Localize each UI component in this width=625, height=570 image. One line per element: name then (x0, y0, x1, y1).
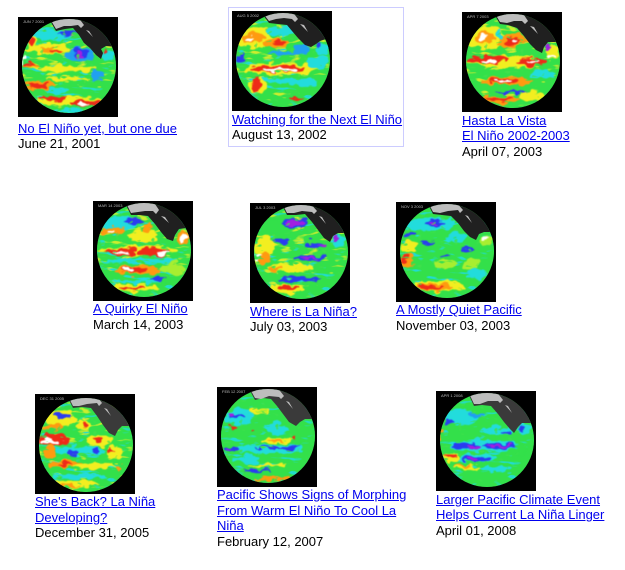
headline link: She's Back? La Niña (35, 494, 155, 509)
globe image: March 2003: MAR 14 2003 (98, 203, 123, 208)
globe image: December 2005: DEC 31 2005 (40, 396, 65, 401)
headline link, second line: El Niño 2002-2003 (462, 128, 570, 143)
globe image: April 2008: APR 1 2008 (441, 393, 463, 398)
headline link: Watching for the Next El Niño (232, 112, 402, 127)
headline link, second line: Developing? (35, 510, 107, 525)
globe image: August 2002: AUG 5 2002 (237, 13, 260, 18)
card: A Mostly Quiet Pacific (396, 202, 522, 333)
globe image: March 2003 (93, 201, 193, 301)
headline link: No El Niño yet, but one due (18, 121, 177, 136)
headline link: Where is La Niña? (250, 304, 357, 319)
card: Where is La Niña? (250, 203, 357, 334)
headline link, second line: Helps Current La Niña Linger (436, 507, 604, 522)
globe image: July 2003 (250, 203, 350, 303)
globe image: April 2003: APR 7 2003 (467, 14, 489, 19)
globe image: February 2007: FEB 12 2007 (222, 389, 246, 394)
card: No El Niño yet (18, 17, 177, 151)
globe image: December 2005 (35, 394, 135, 494)
card: Pacific Shows Signs of Morphing (217, 387, 406, 549)
headline link: Hasta La Vista (462, 113, 546, 128)
globe image: February 2007 (217, 387, 317, 487)
globe image: April 2003 (462, 12, 562, 112)
globe image: April 2008 (436, 391, 536, 491)
card: A Quirky El Niño (93, 201, 193, 332)
date: February 12, 2007 (217, 534, 323, 549)
date: April 07, 2003 (462, 144, 542, 159)
card: Larger Pacific Climate Event (436, 391, 604, 538)
date: July 03, 2003 (250, 319, 327, 334)
globe image: June 2001: JUN 7 2001 (23, 19, 45, 24)
date: June 21, 2001 (18, 136, 100, 151)
date: November 03, 2003 (396, 318, 510, 333)
globe image: November 2003 (396, 202, 496, 302)
date: August 13, 2002 (232, 127, 327, 142)
headline link, third line: Niña (217, 518, 244, 533)
card: Watching for the Next El Niño (highlighted box) (228, 7, 404, 147)
globe image: August 2002 (232, 11, 332, 111)
card: She's Back? (35, 394, 156, 540)
date: April 01, 2008 (436, 523, 516, 538)
card: Hasta La Vista (462, 12, 570, 159)
globe image: June 2001 (18, 17, 118, 117)
globe image: November 2003: NOV 3 2003 (401, 204, 424, 209)
date: December 31, 2005 (35, 525, 149, 540)
headline link: Larger Pacific Climate Event (436, 492, 600, 507)
headline link: A Mostly Quiet Pacific (396, 302, 522, 317)
headline link: Pacific Shows Signs of Morphing (217, 487, 406, 502)
headline link: A Quirky El Niño (93, 301, 188, 316)
globe image: July 2003: JUL 3 2003 (255, 205, 276, 210)
headline link, second line: From Warm El Niño To Cool La (217, 503, 396, 518)
date: March 14, 2003 (93, 317, 183, 332)
